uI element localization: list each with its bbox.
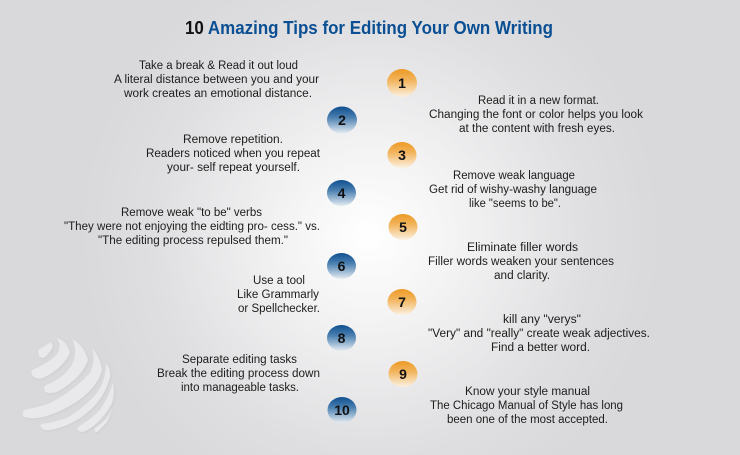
tip 1 badge: [387, 69, 417, 97]
tip 9 badge: 9: [399, 366, 407, 382]
tip 3 badge: [388, 142, 416, 168]
tip 10 text (style manual, right): been one of the most accepted.: [447, 414, 608, 426]
tip 3 badge: 3: [398, 147, 406, 163]
tip 6 text (filler words, right): Eliminate filler words: [467, 242, 578, 254]
tip 9 badge: [388, 361, 418, 387]
title: 10 Amazing Tips for Editing Your Own Writing: [185, 18, 553, 38]
tip 10 badge: 10: [334, 402, 350, 418]
tip 10 text (style manual, right): The Chicago Manual of Style has long: [430, 400, 623, 412]
tip 4 text (weak language, right): like "seems to be".: [469, 198, 561, 210]
tip 6 text (filler words, right): and clarity.: [494, 270, 550, 282]
tip 2 text (read in new format, right): at the content with fresh eyes.: [459, 123, 615, 135]
tip 2 text (read in new format, right): Changing the font or color helps you look: [429, 109, 643, 121]
tip 8 text (kill verys, right): "Very" and "really" create weak adjectives.: [428, 328, 650, 340]
tip 2 text (read in new format, right): Read it in a new format.: [478, 95, 599, 107]
tip 2 text (read in new format, right): [429, 95, 643, 135]
tip 9 text (separate tasks, left): into manageable tasks.: [181, 382, 299, 394]
tip 9 text (separate tasks, left): [157, 354, 320, 394]
tip 3 text (remove repetition, left): your- self repeat yourself.: [167, 162, 300, 174]
tip 7 badge: [388, 289, 416, 315]
tip 8 text (kill verys, right): Find a better word.: [491, 342, 590, 354]
tip 8 text (kill verys, right): [428, 314, 650, 354]
tip 4 badge: [327, 180, 356, 206]
tip 7 text (use a tool, left): Like Grammarly: [237, 289, 319, 301]
tip 8 text (kill verys, right): kill any "verys": [503, 314, 581, 326]
tip 10 text (style manual, right): Know your style manual: [465, 386, 590, 398]
tip 8 badge: [327, 325, 356, 351]
tip 5 text (to be verbs, left): [64, 207, 320, 247]
tip 6 text (filler words, right): [428, 242, 614, 282]
tip 1 text: [114, 60, 319, 100]
tip 4 text (weak language, right): Remove weak language: [453, 170, 575, 182]
tip 4 text (weak language, right): [429, 170, 597, 210]
tip 3 text (remove repetition, left): Remove repetition.: [183, 134, 283, 146]
tip 1 text: A literal distance between you and your: [114, 74, 319, 86]
tip 1 text: work creates an emotional distance.: [123, 88, 312, 100]
tip 5 text (to be verbs, left): "They were not enjoying the eidting pro- cess." vs.: [64, 221, 320, 233]
tip 7 text (use a tool, left): [237, 275, 320, 315]
tip 6 badge: 6: [338, 258, 346, 274]
tip 10 badge: [328, 397, 356, 423]
tip 7 text (use a tool, left): or Spellchecker.: [238, 303, 320, 315]
tip 4 badge: 4: [338, 185, 346, 201]
tip 1 text: Take a break & Read it out loud: [139, 60, 298, 72]
tip 9 text (separate tasks, left): Break the editing process down: [157, 368, 320, 380]
tip 5 badge: 5: [399, 219, 407, 235]
tip 1 badge: 1: [398, 75, 406, 91]
tip 3 text (remove repetition, left): Readers noticed when you repeat: [146, 148, 321, 160]
tip 4 text (weak language, right): Get rid of wishy-washy language: [429, 184, 597, 196]
tip 5 text (to be verbs, left): Remove weak "to be" verbs: [121, 207, 262, 219]
tip 5 text (to be verbs, left): "The editing process repulsed them.": [98, 235, 288, 247]
tip 9 text (separate tasks, left): Separate editing tasks: [182, 354, 297, 366]
icon: striped globe watermark: [22, 338, 114, 432]
tip 8 badge: 8: [338, 330, 346, 346]
tip 6 badge: [327, 253, 356, 279]
tip 7 text (use a tool, left): Use a tool: [253, 275, 305, 287]
tip 2 badge: [327, 106, 357, 134]
tip 7 badge: 7: [398, 294, 406, 310]
tip 2 badge: 2: [338, 112, 346, 128]
tip 5 badge: [388, 214, 418, 240]
tip 10 text (style manual, right): [430, 386, 623, 426]
tip 6 text (filler words, right): Filler words weaken your sentences: [428, 256, 614, 268]
tip 3 text (remove repetition, left): [146, 134, 321, 174]
